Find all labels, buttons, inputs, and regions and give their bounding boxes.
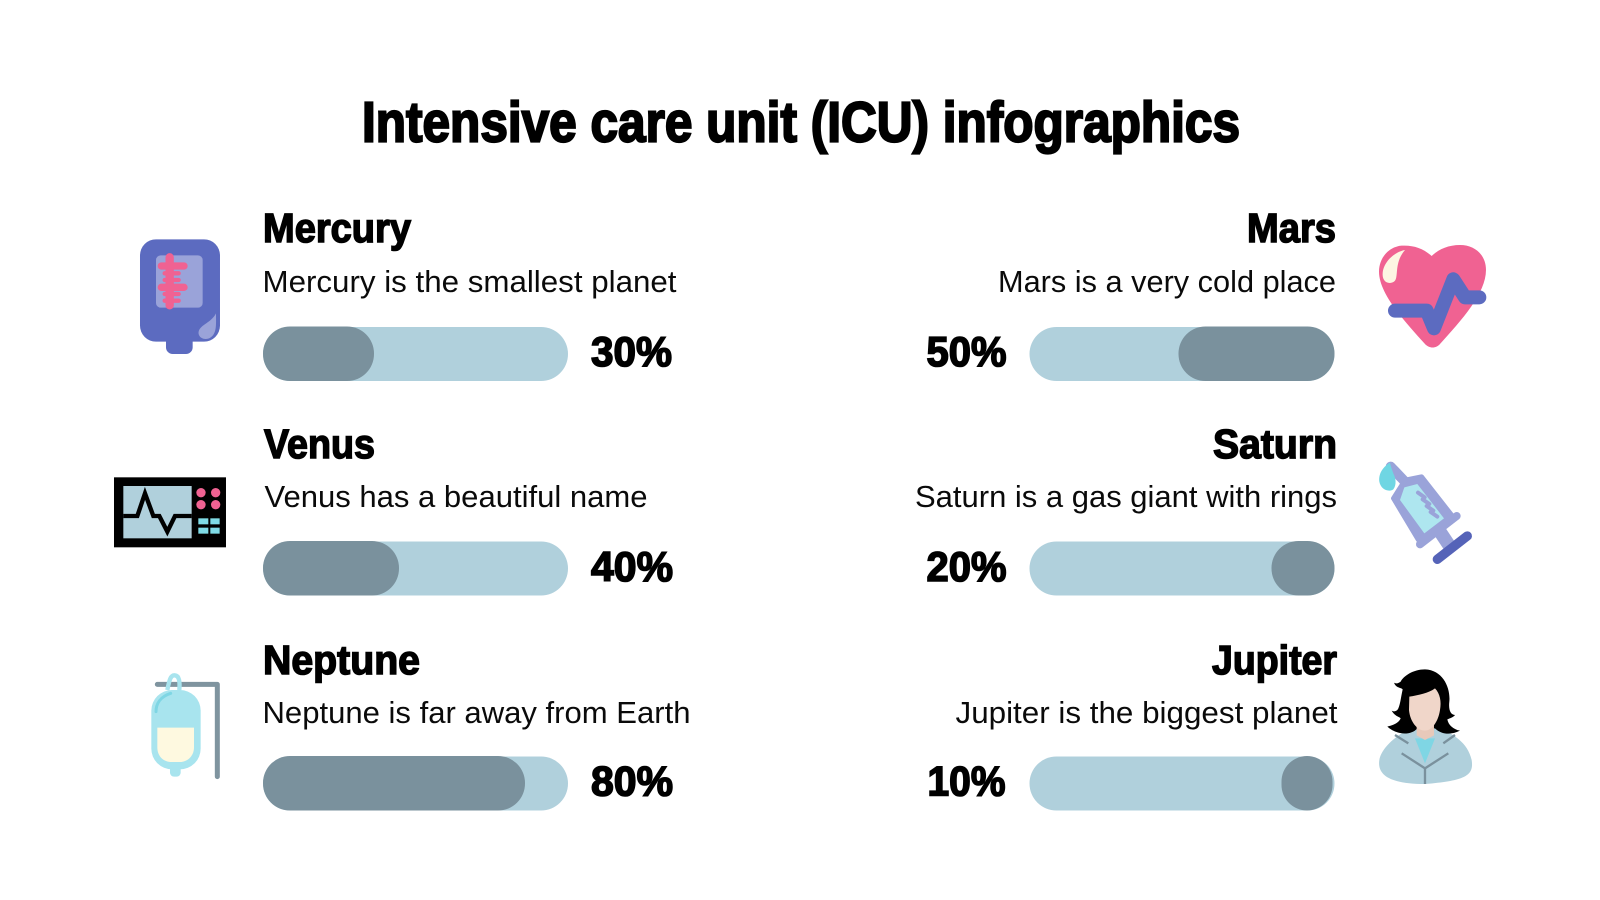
description: Saturn is a gas giant with rings (915, 480, 1337, 514)
value: 80% (591, 758, 673, 804)
panel: Saturn (915, 421, 1467, 596)
icon: heart monitor (114, 477, 226, 547)
progress bar 80% (263, 756, 568, 810)
panel: Mars (926, 205, 1486, 381)
icon: IV drip (151, 675, 217, 777)
value: 20% (926, 543, 1006, 590)
description: Venus has a beautiful name (264, 480, 648, 514)
icon: heart with pulse (1379, 245, 1486, 347)
value: 10% (928, 758, 1006, 804)
heading: Neptune (263, 637, 420, 683)
progress bar 20% (1030, 541, 1334, 596)
description: Mercury is the smallest planet (262, 265, 677, 299)
value: 40% (591, 543, 673, 590)
value: 30% (591, 328, 672, 375)
icon: blood bag (140, 239, 220, 354)
panel: Venus (114, 421, 673, 596)
value: 50% (926, 328, 1006, 375)
heading: Jupiter (1212, 637, 1337, 683)
description: Neptune is far away from Earth (262, 696, 690, 730)
progress bar 30% (263, 326, 568, 381)
panel: Jupiter (928, 637, 1472, 810)
icon: doctor (1379, 669, 1472, 784)
icon: syringe (1379, 463, 1467, 559)
panel: Neptune (151, 637, 691, 810)
progress bar 40% (263, 541, 568, 596)
heading: Saturn (1213, 421, 1337, 467)
heading: Mercury (263, 205, 411, 251)
heading: Mars (1247, 205, 1336, 251)
panel: Mercury (140, 205, 677, 381)
progress bar 50% (1030, 326, 1334, 381)
progress bar 10% (1030, 756, 1334, 810)
title: Intensive care unit (ICU) infographics (362, 90, 1240, 154)
heading: Venus (264, 421, 375, 467)
description: Mars is a very cold place (998, 265, 1336, 299)
description: Jupiter is the biggest planet (956, 696, 1338, 730)
